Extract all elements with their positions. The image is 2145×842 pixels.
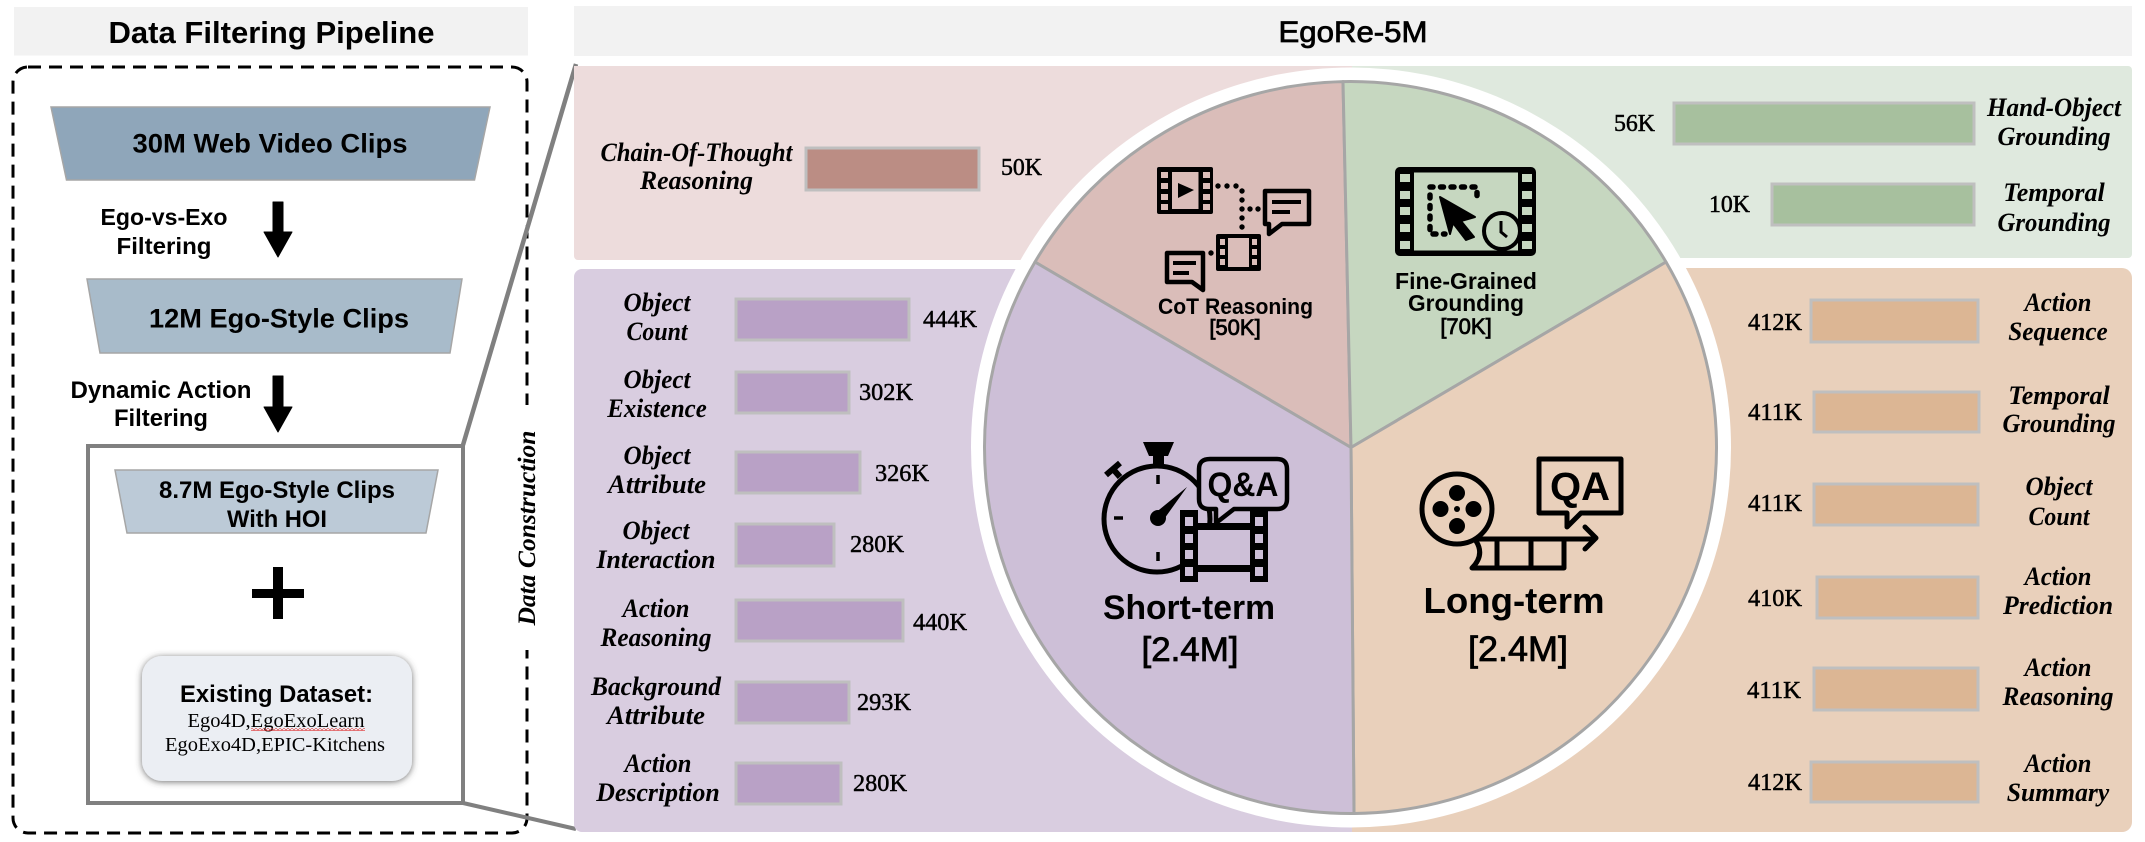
bar: Object Count	[624, 288, 978, 346]
text: Long-term count: [2.4M]	[1468, 630, 1568, 669]
bar: Object Count: Object	[2026, 472, 2093, 501]
bar: Object Count	[1748, 472, 2093, 531]
bar: Object Existence	[606, 365, 914, 423]
bar: Action Reasoning: 440K	[913, 610, 968, 636]
bar: Temporal Grounding: Temporal	[2003, 178, 2106, 207]
bar chart: Chain-Of-Thought Reasoning: Reasoning	[639, 166, 753, 195]
callout: Existing Dataset: Ego4D,EgoExoLearn	[188, 710, 364, 732]
bar: Action Summary	[1748, 749, 2110, 807]
arrow: down 2	[264, 376, 292, 432]
bar: Hand-Object Grounding	[1614, 93, 2122, 151]
bar chart: fine-grained grounding categories	[1614, 93, 2122, 237]
bar: Action Sequence: Action	[2023, 288, 2092, 317]
icon: long-term film reel: QA	[1550, 465, 1610, 509]
bar: Action Summary: Action	[2023, 749, 2092, 778]
callout: Existing Dataset: Existing Dataset:	[180, 681, 373, 708]
bar: Object Interaction	[596, 516, 905, 574]
bar: Hand-Object Grounding: 56K	[1614, 111, 1656, 137]
text: Dynamic Action Filtering	[70, 377, 251, 432]
bar: Object Attribute: Attribute	[606, 470, 706, 499]
bar: Object Count: 444K	[923, 307, 978, 333]
callout: Existing Dataset	[142, 656, 412, 781]
bar: Action Sequence: 412K	[1748, 310, 1803, 336]
text: Short-term count	[1103, 589, 1275, 669]
bar: Action Prediction	[1748, 562, 2113, 620]
icon: plus	[252, 567, 304, 619]
bar: Background Attribute: Attribute	[605, 701, 705, 730]
text: CoT Reasoning count: [50K]	[1209, 315, 1261, 340]
bar: Object Count: Object	[624, 288, 691, 317]
bar: Temporal Grounding: Grounding	[2002, 409, 2116, 438]
funnel step: 8.7M Ego-Style Clips With HOI	[115, 470, 438, 533]
bar: Background Attribute	[590, 672, 912, 730]
label: Data Construction: Data Construction	[514, 430, 541, 627]
bar: Action Description: 280K	[853, 771, 908, 797]
bar: Action Reasoning: Reasoning	[2002, 682, 2114, 711]
bar: Object Count: Count	[2028, 502, 2090, 531]
bar: Action Prediction: 410K	[1748, 586, 1803, 612]
connector line: bottom zoom line	[463, 803, 576, 829]
icon: short-term stopwatch	[1104, 442, 1287, 582]
bar: Object Interaction: Object	[622, 516, 690, 545]
bar: Temporal Grounding: 411K	[1748, 400, 1803, 426]
bar: Action Reasoning: Action	[621, 594, 690, 623]
arrow: down 1	[264, 202, 292, 257]
funnel step: 30M Web Video Clips: 30M Web Video Clips	[132, 128, 408, 158]
bar: Object Attribute: Object	[624, 441, 691, 470]
icon: short-term stopwatch: Q&A	[1208, 466, 1278, 504]
bar: Action Reasoning: Action	[2023, 653, 2092, 682]
heading: Data Filtering Pipeline	[14, 7, 528, 56]
panel: short-term background	[574, 269, 1352, 832]
bar: Action Summary: 412K	[1748, 770, 1803, 796]
bar: Background Attribute: Background	[590, 672, 722, 701]
text: Long-term count	[1424, 580, 1604, 669]
bar chart: Chain-Of-Thought Reasoning: 50K	[1001, 155, 1043, 181]
callout: Existing Dataset: EgoExo4D,EPIC-Kitchens	[165, 734, 385, 756]
text: Ego-vs-Exo Filtering: Filtering	[116, 233, 212, 259]
text: CoT Reasoning count	[1158, 294, 1313, 340]
panel: final data construction box	[88, 446, 463, 803]
panel: grounding background	[1352, 66, 2132, 258]
bar chart: Chain-Of-Thought Reasoning: Chain-Of-Thought	[600, 138, 793, 167]
text: Long-term count: Long-term	[1424, 580, 1604, 621]
bar: Object Attribute	[606, 441, 930, 499]
panel: long-term background	[1352, 268, 2132, 832]
funnel step: 8.7M Ego-Style Clips With HOI: With HOI	[227, 506, 327, 533]
bar: Action Reasoning: 411K	[1747, 678, 1802, 704]
bar: Action Prediction: Action	[2023, 562, 2092, 591]
bar: Action Description	[595, 749, 908, 807]
bar: Action Sequence	[1748, 288, 2108, 346]
text: CoT Reasoning count: CoT Reasoning	[1158, 294, 1313, 319]
heading: EgoRe-5M	[574, 6, 2132, 56]
bar: Action Sequence: Sequence	[2008, 317, 2108, 346]
text: Ego-vs-Exo Filtering: Ego-vs-Exo	[100, 204, 228, 230]
bar: Action Reasoning	[600, 594, 968, 652]
icon: long-term film reel	[1422, 459, 1621, 568]
bar: Action Reasoning: Reasoning	[600, 623, 712, 652]
chart: pie	[971, 68, 1731, 828]
bar: Object Count: Count	[626, 317, 688, 346]
bar: Object Interaction: 280K	[850, 532, 905, 558]
bar: Action Summary: Summary	[2007, 778, 2110, 807]
bar: Hand-Object Grounding: Hand-Object	[1986, 93, 2122, 122]
funnel step: 12M Ego-Style Clips: 12M Ego-Style Clips	[149, 304, 409, 334]
bar: Object Count: 411K	[1748, 491, 1803, 517]
bar chart: long-term categories	[1747, 288, 2116, 807]
panel: pipeline dashed frame	[13, 67, 541, 833]
bar: Temporal Grounding: Grounding	[1998, 208, 2110, 237]
text: Fine-Grained Grounding count: Grounding	[1408, 290, 1524, 316]
bar: Object Existence: Object	[624, 365, 691, 394]
heading: EgoRe-5M: EgoRe-5M	[1278, 16, 1428, 49]
bar: Action Description: Description	[595, 778, 720, 807]
bar: Temporal Grounding: Temporal	[2008, 381, 2111, 410]
bar: Object Existence: 302K	[859, 380, 914, 406]
bar chart: Chain-Of-Thought Reasoning	[600, 138, 1043, 195]
text: Dynamic Action Filtering: Dynamic Action	[70, 377, 251, 404]
bar: Hand-Object Grounding: Grounding	[1998, 122, 2110, 151]
text: Fine-Grained Grounding count: [70K]	[1440, 314, 1492, 339]
connector line: top zoom line	[463, 64, 576, 445]
bar: Action Prediction: Prediction	[2002, 591, 2113, 620]
text: Short-term count: Short-term	[1103, 589, 1275, 627]
text: Fine-Grained Grounding count: Fine-Grained	[1395, 268, 1537, 294]
panel: CoT background	[574, 66, 1352, 260]
heading: Data Filtering Pipeline: Data Filtering Pipeline	[108, 15, 434, 50]
icon: CoT reasoning	[1157, 167, 1309, 290]
bar chart: short-term categories	[590, 288, 978, 807]
bar: Temporal Grounding	[1709, 178, 2110, 237]
bar: Object Existence: Existence	[606, 394, 707, 423]
text: Dynamic Action Filtering: Filtering	[114, 405, 208, 432]
bar: Action Description: Action	[623, 749, 692, 778]
bar: Object Attribute: 326K	[875, 461, 930, 487]
icon: fine-grained grounding	[1395, 167, 1536, 256]
bar: Object Interaction: Interaction	[596, 545, 716, 574]
bar: Temporal Grounding: 10K	[1709, 192, 1751, 218]
bar: Action Reasoning	[1747, 653, 2114, 711]
funnel step: 8.7M Ego-Style Clips With HOI: 8.7M Ego-Style Clips	[159, 477, 395, 504]
text: Short-term count: [2.4M]	[1142, 631, 1238, 669]
text: Ego-vs-Exo Filtering	[100, 204, 228, 259]
bar: Temporal Grounding	[1748, 381, 2116, 438]
bar: Background Attribute: 293K	[857, 690, 912, 716]
text: Fine-Grained Grounding count	[1395, 268, 1537, 339]
funnel step: 30M Web Video Clips	[51, 107, 490, 180]
funnel step: 12M Ego-Style Clips	[87, 279, 462, 353]
